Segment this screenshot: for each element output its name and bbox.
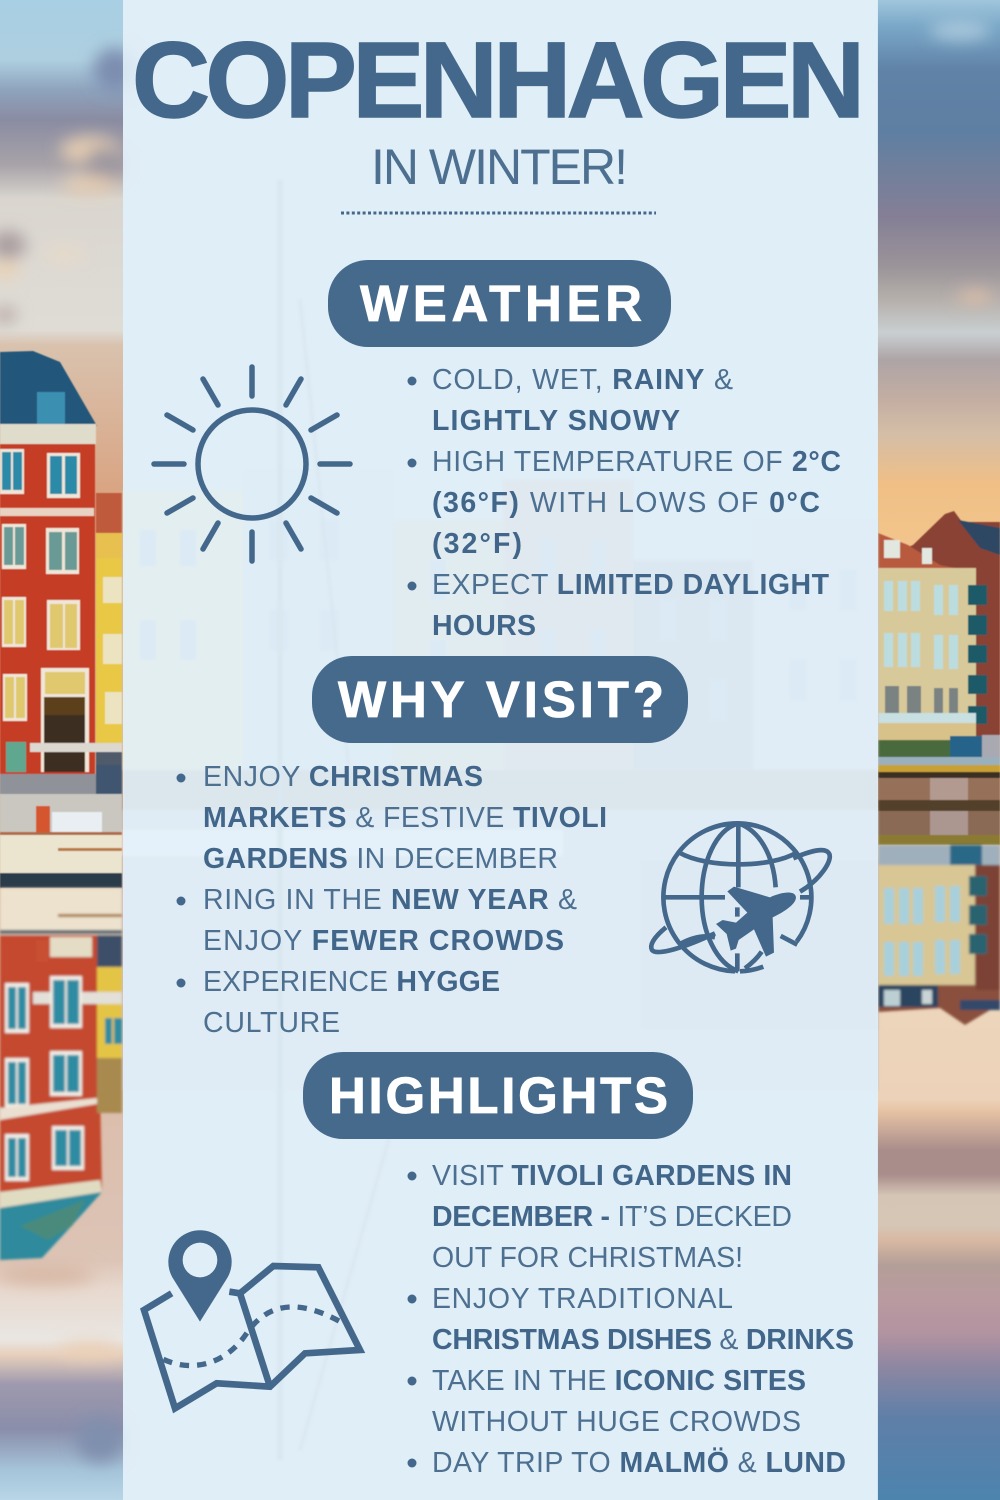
text block: weather bullets: COLD, WET, RAINY & — [432, 364, 733, 396]
text block: highlights bullets: DAY TRIP TO MALMÖ & LUND — [432, 1447, 846, 1479]
icon: globe with plane — [651, 823, 830, 971]
text block: weather bullets: (36°F) WITH LOWS OF 0°C — [432, 487, 820, 519]
text block: why visit bullets: ENJOY FEWER CROWDS — [203, 925, 564, 957]
heading: highlights: HIGHLIGHTS — [329, 1067, 668, 1124]
text block: weather bullets — [408, 364, 841, 642]
text block: highlights bullets: OUT FOR CHRISTMAS! — [432, 1242, 743, 1274]
text block: why visit bullets: ENJOY CHRISTMAS — [203, 761, 483, 793]
heading: weather — [328, 260, 671, 347]
title: COPENHAGEN — [132, 19, 865, 140]
text block: why visit bullets: MARKETS & FESTIVE TIVOLI — [203, 802, 607, 834]
text block: weather bullets: (32°F) — [432, 528, 522, 560]
text block: why visit bullets: GARDENS IN DECEMBER — [203, 843, 558, 875]
text block: highlights bullets: DECEMBER - IT’S DECKED — [432, 1201, 792, 1233]
text block: highlights bullets: CHRISTMAS DISHES & DRINKS — [432, 1324, 854, 1356]
text block: why visit bullets — [176, 761, 607, 1039]
text block: why visit bullets: RING IN THE NEW YEAR & — [203, 884, 577, 916]
text block: why visit bullets: CULTURE — [203, 1007, 340, 1039]
panel: translucent central column — [123, 0, 878, 1500]
text block: weather bullets: HIGH TEMPERATURE OF 2°C — [432, 446, 841, 478]
text block: highlights bullets: VISIT TIVOLI GARDENS IN — [432, 1160, 792, 1192]
heading: highlights — [303, 1052, 693, 1139]
text block: highlights bullets: ENJOY TRADITIONAL — [432, 1283, 733, 1315]
text block: highlights bullets — [408, 1160, 854, 1479]
text block: highlights bullets: TAKE IN THE ICONIC SITES — [432, 1365, 806, 1397]
icon: sun — [154, 367, 350, 561]
text block: highlights bullets: WITHOUT HUGE CROWDS — [432, 1406, 801, 1438]
left reflection — [0, 888, 122, 1260]
left buildings — [0, 351, 122, 888]
text block: why visit bullets: EXPERIENCE HYGGE — [203, 966, 500, 998]
heading: why visit — [312, 656, 688, 743]
text block: weather bullets: LIGHTLY SNOWY — [432, 405, 680, 437]
text block: weather bullets: HOURS — [432, 610, 536, 642]
right reflection — [878, 845, 1000, 1025]
subtitle: IN WINTER! — [371, 139, 628, 195]
heading: why visit: WHY VISIT? — [338, 671, 664, 728]
faded buildings behind panel — [123, 180, 878, 1460]
text block: weather bullets: EXPECT LIMITED DAYLIGHT — [432, 569, 830, 601]
right buildings — [878, 511, 1000, 845]
heading: weather: WEATHER — [360, 275, 642, 332]
icon: map with location pin — [144, 1230, 360, 1408]
